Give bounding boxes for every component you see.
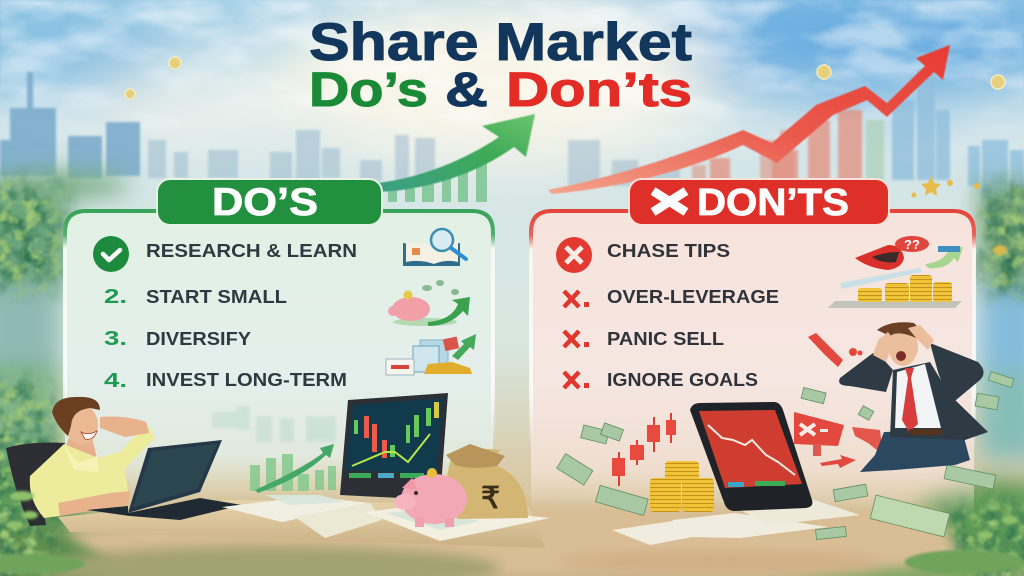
- falling banknotes: [557, 372, 1014, 540]
- panel: Do's: [65, 179, 493, 500]
- forearm on keyboard: [58, 491, 130, 516]
- title line: Do's & Don'ts: Don’ts: [506, 64, 692, 117]
- chair: [6, 443, 65, 526]
- item 1: chase tips: CHASE TIPS: [607, 240, 730, 261]
- title: [309, 13, 692, 117]
- item 4: invest long-term: [104, 369, 347, 392]
- badge: DON'TS: DON’TS: [697, 182, 849, 224]
- trousers: [860, 430, 970, 472]
- left hand: [873, 332, 894, 362]
- desk scene: left: [6, 393, 550, 548]
- item 4: ignore goals: IGNORE GOALS: [607, 369, 758, 390]
- face: [888, 326, 918, 366]
- background: right foliage and water: [780, 185, 1024, 576]
- title line: Do's & Don'ts: &: [445, 64, 488, 117]
- title line: Do's & Don'ts: [309, 64, 692, 117]
- panel card background: [65, 211, 493, 500]
- money bag with rupee: [446, 444, 528, 519]
- icon: white X: [653, 191, 686, 212]
- stars near right panel: [912, 176, 980, 198]
- ground under scenes: [40, 505, 960, 576]
- arrow: green rising: [378, 114, 535, 202]
- panel border: [65, 211, 493, 445]
- title line: Share Market: Share Market: [309, 13, 692, 72]
- item 2: start small: [104, 280, 470, 326]
- badge: DO'S: DO’S: [212, 181, 318, 224]
- belt: [909, 429, 941, 435]
- shirt body: [30, 423, 155, 518]
- money bag with rupee: ₹: [481, 482, 500, 515]
- icon: green check circle: [93, 236, 129, 272]
- pale skyline inside panel: [212, 406, 336, 442]
- panel card background: [531, 211, 974, 515]
- smile: [81, 431, 97, 439]
- item 1: chase tips: [556, 236, 963, 308]
- item 2: start small: START SMALL: [146, 286, 287, 307]
- panel border: [531, 211, 974, 450]
- background: left foliage: [0, 171, 150, 576]
- phone with falling chart: [690, 402, 812, 511]
- icon: lips, speech bubble and coin stacks: [828, 236, 963, 308]
- item 1: research & learn: [93, 229, 466, 272]
- background: city skyline: [0, 70, 1024, 200]
- icon: lips, speech bubble and coin stacks: ??: [904, 237, 920, 252]
- badge: DON'TS: [629, 179, 889, 225]
- red candlesticks: [612, 413, 676, 486]
- piggy bank: [394, 468, 467, 527]
- gold coin stacks: [650, 461, 714, 512]
- red broken arrows: [808, 333, 883, 468]
- jacket body: [890, 362, 988, 440]
- neck: [62, 435, 98, 462]
- item 3: diversify: DIVERSIFY: [146, 328, 252, 349]
- decorative gold coins in sky: [125, 57, 1005, 99]
- icon: diversified assets with gold bars: [386, 334, 476, 375]
- item 2: over-leverage: OVER-LEVERAGE: [607, 286, 779, 307]
- hair: [52, 397, 100, 436]
- item 3: diversify: 3.: [104, 328, 127, 350]
- icon: book and magnifier: [403, 229, 466, 266]
- arrow: red zigzag: [548, 45, 950, 194]
- panel: Don'ts: [531, 179, 974, 515]
- tablet with trading chart: [340, 393, 448, 500]
- item 4: invest long-term: 4.: [104, 370, 127, 392]
- icon: piggy bank and arrow: [388, 280, 470, 326]
- item 3: diversify: [104, 328, 476, 375]
- desk scene: right: [557, 322, 1014, 545]
- left sleeve: [839, 353, 893, 392]
- badge: DO'S: [157, 179, 382, 225]
- icon: red X circle: [556, 237, 592, 273]
- foreground foliage: bottom corners: [0, 491, 1024, 574]
- papers on desk: [222, 495, 550, 541]
- item 4: invest long-term: INVEST LONG-TERM: [146, 369, 347, 390]
- shirt: [895, 364, 941, 428]
- mouth: [896, 351, 906, 361]
- scattered papers on ground: [612, 495, 860, 545]
- raised forearm: [100, 417, 149, 437]
- person: panicking investor: [839, 322, 988, 472]
- shirt shading: [64, 446, 99, 472]
- person: relaxed investor: [30, 397, 155, 518]
- face: [66, 405, 98, 445]
- hair: [877, 322, 919, 338]
- laptop: [87, 440, 242, 520]
- item 2: start small: 2.: [104, 286, 127, 308]
- desk: [58, 500, 545, 548]
- small bar chart with arrow: [250, 444, 336, 493]
- item 3: panic sell: PANIC SELL: [607, 328, 724, 349]
- item 1: research & learn: RESEARCH & LEARN: [146, 240, 357, 261]
- right sleeve: [930, 343, 984, 405]
- title line: Do's & Don'ts: Do’s: [309, 64, 428, 117]
- red warning sign: [794, 412, 844, 456]
- item 3: panic sell: [564, 328, 724, 349]
- right hand: [908, 325, 934, 350]
- tie: [902, 368, 918, 432]
